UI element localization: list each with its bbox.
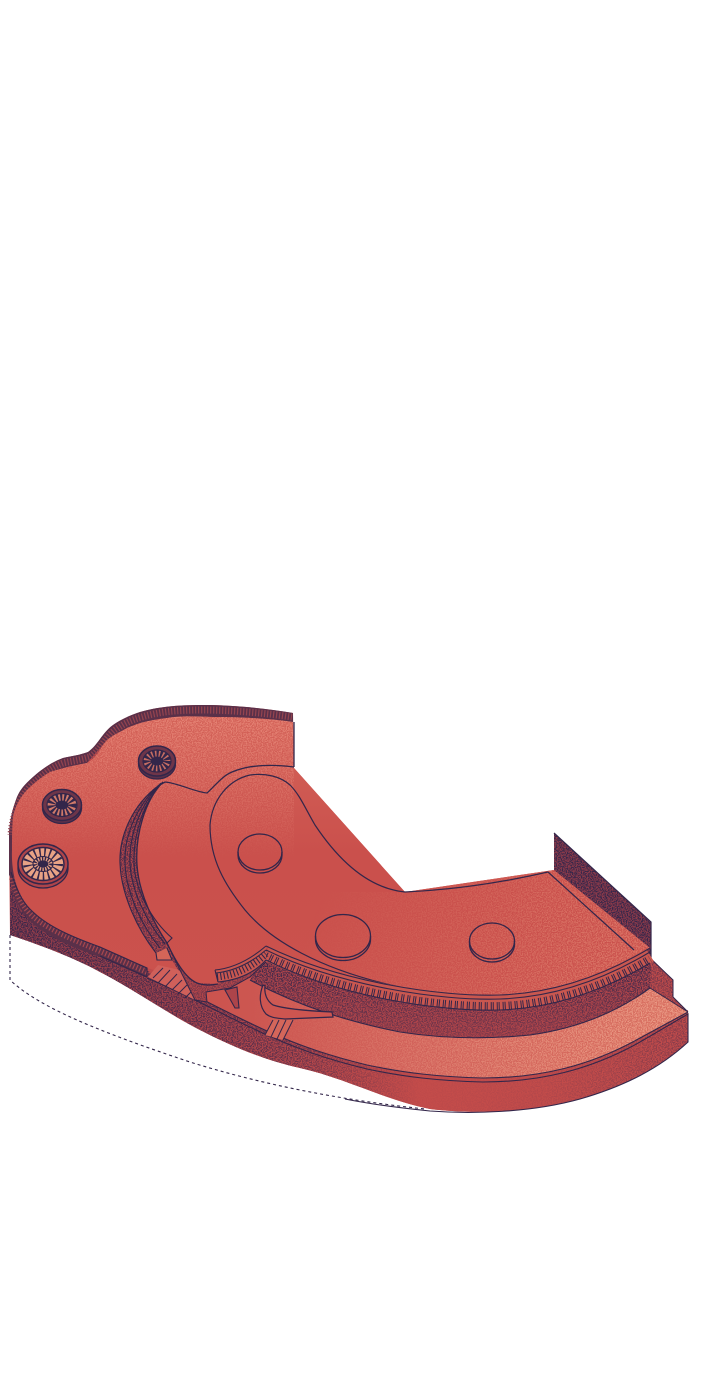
connecting strip and pier block — [167, 943, 266, 1002]
curved bench on ledge — [260, 985, 333, 1019]
middle wall below colonnade — [250, 950, 651, 1038]
lower wall top edge line — [147, 974, 688, 1112]
main colonnade band — [266, 946, 650, 1010]
rosette medium — [42, 790, 82, 824]
rosette small — [138, 746, 176, 779]
rosette large — [18, 844, 68, 888]
silhouette base — [9, 705, 688, 1112]
raised platform outline — [137, 722, 294, 985]
dotted footprint outline — [10, 935, 425, 1109]
left bottom colonnade — [10, 870, 147, 978]
back wall right, dark — [554, 833, 651, 960]
hatched stair right — [265, 1020, 293, 1040]
small pier — [225, 987, 239, 1008]
main upper surface — [12, 716, 650, 995]
lower ledge surface — [147, 972, 688, 1078]
hatched stair left — [148, 965, 195, 1000]
rear parapet wall with ticks — [9, 705, 293, 910]
disc 3 — [470, 923, 514, 962]
lower outer wall — [10, 870, 688, 1112]
disc 2 — [316, 914, 370, 960]
right stepped side wall — [650, 958, 688, 1012]
disc 1 — [238, 834, 282, 873]
left concave colonnade — [215, 946, 266, 982]
inner bean outline — [210, 774, 634, 987]
raised stepped arc band — [120, 782, 197, 983]
parapet ticks — [11, 710, 292, 835]
